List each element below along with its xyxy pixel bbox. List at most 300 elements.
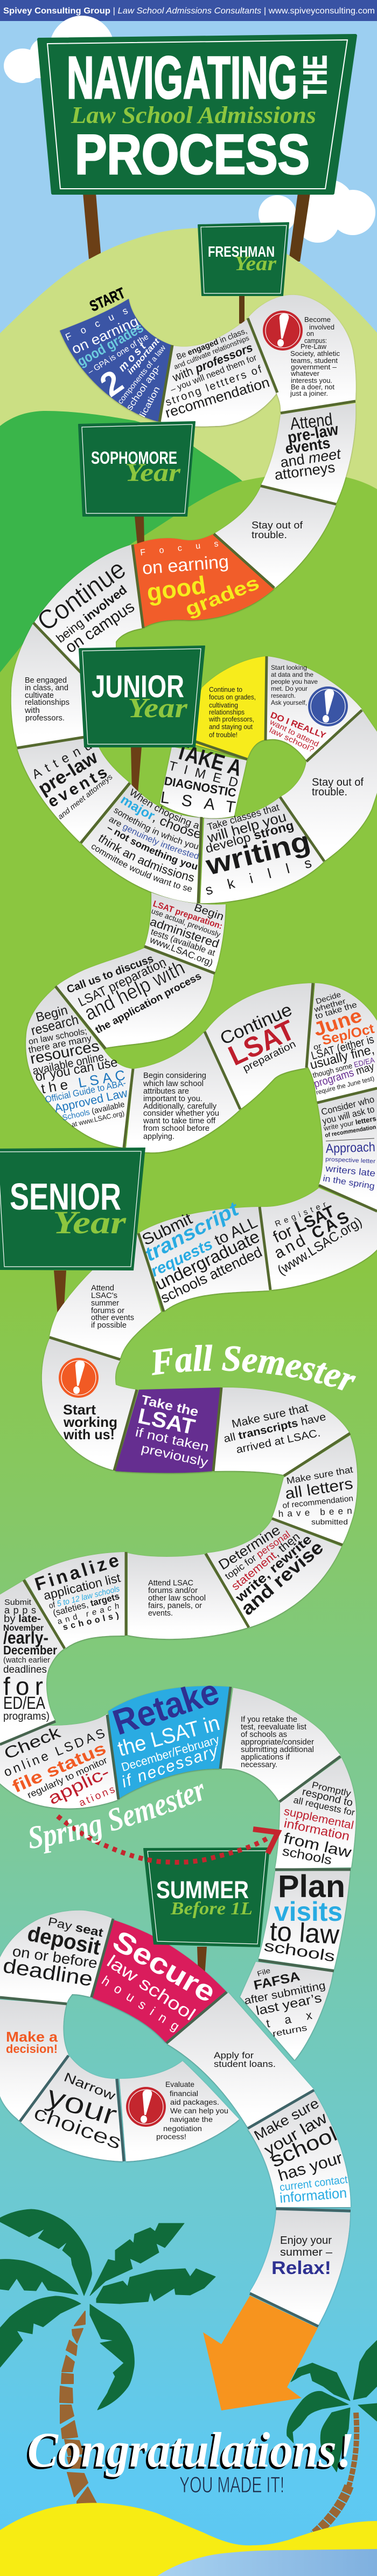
tile text: of 5 to 12 law schools [48, 1584, 121, 1611]
icon: orange exclamation [59, 1358, 99, 1398]
tile text: consider whether you [143, 1109, 219, 1118]
tile text: When choosing a [130, 788, 199, 829]
tile text: Attend [30, 738, 94, 782]
tile text [134, 1393, 210, 1470]
tile text: after submitting [243, 1980, 326, 2007]
road tile: become involved on campus [248, 295, 356, 413]
tile text: appropriate/consider [241, 1738, 314, 1747]
tile text: events [45, 763, 110, 811]
tile text [251, 2095, 348, 2206]
tile text: programs) [3, 1711, 50, 1722]
tile text: Begin [192, 902, 225, 923]
header bar: Spivey Consulting Group | Law School Admissions Consultants | www.spiveyconsulting.com [3, 6, 375, 16]
tile text: Finalize [32, 1550, 121, 1595]
tile text: Focus [139, 539, 219, 558]
tile text: deposit [25, 1922, 102, 1960]
tile text [139, 539, 262, 620]
tile text: for [3, 1672, 43, 1700]
tile text: relationships [209, 708, 245, 716]
tile text: submitting additional [241, 1746, 314, 1754]
sign: junior year [79, 646, 205, 747]
tile text: housing [99, 1973, 182, 2034]
tile text: skills [204, 854, 313, 898]
sign: summer before 1l: SUMMER [156, 1876, 249, 1904]
tile text: applying. [143, 1132, 174, 1141]
tile text: major, choose [121, 796, 199, 838]
tile text: at data and the [271, 671, 313, 678]
tile text: applications if [241, 1753, 290, 1762]
tile text: school [267, 2123, 340, 2172]
tile text: available online, [31, 1050, 108, 1077]
tile text: Attend LSAC [148, 1578, 193, 1588]
tile text: whether [312, 997, 347, 1014]
tile text: schools) [62, 1611, 120, 1632]
tile text: from law [282, 1830, 353, 1861]
tile text: lication [138, 385, 162, 419]
tile text [241, 1715, 314, 1769]
tile text: Narrow [62, 2070, 117, 2104]
tile text [309, 990, 376, 1096]
sign: summer before 1l [144, 1848, 269, 1947]
tile text: December/February [120, 1733, 221, 1774]
tile text: on campus [62, 597, 138, 657]
road tile: check online lsdas file status [0, 1714, 118, 1809]
tile text: government – [291, 363, 337, 371]
tile text: other events [91, 1313, 134, 1322]
tile text: process! [156, 2132, 186, 2141]
tile text: schools attended [158, 1244, 264, 1306]
road tile: begin lsat preparation [144, 892, 226, 972]
tile text: Pay seat [47, 1914, 105, 1940]
tile text: school app- [124, 362, 163, 412]
road tile: stay out of trouble (sophomore) [214, 487, 336, 588]
title: script subtitle: Law School Admissions [71, 102, 316, 128]
tile text: working [63, 1414, 117, 1430]
road tile: make a decision [0, 2000, 68, 2121]
road tile: register for lsat and cas [261, 1188, 377, 1290]
tile text: in the spring [322, 1174, 375, 1191]
callout: do i really want to attend law school: DO I REALLY [269, 711, 327, 741]
tile text: – you will need them for [169, 353, 259, 395]
tile text [148, 899, 225, 968]
road tile: when choosing a major [82, 784, 200, 904]
tile text: writers late [324, 1163, 376, 1179]
tile text: ED/EA [3, 1693, 46, 1713]
road tile: attend pre-law events (junior) [17, 737, 130, 843]
tile text: of schools as [241, 1730, 287, 1739]
tile text: Schools (available [61, 1100, 125, 1123]
tile text [163, 326, 271, 421]
hill: light green [0, 228, 377, 539]
tile text: file status [9, 1738, 109, 1796]
road tile: retake the lsat [108, 1671, 229, 1798]
tile text: Stay out of [252, 520, 303, 531]
tile text: research [30, 1012, 80, 1039]
tile text: all letters [284, 1475, 354, 1503]
road tile: begin considering law school attributes [126, 1032, 240, 1152]
tile text: write your letters [323, 1114, 377, 1132]
icon: blue exclamation [308, 686, 348, 726]
tile text: – GPA is one of the [86, 332, 150, 376]
tile text: supplemental [283, 1805, 355, 1832]
tile text: Take classes that [206, 802, 281, 833]
tile text: though some ED/EA [312, 1055, 376, 1080]
road tile: continue to focus on grades (yellow) [183, 656, 266, 759]
sign: freshman year [198, 223, 289, 296]
road tile: be engaged in class (junior) [11, 623, 86, 747]
tile text: for LSAT [270, 1203, 338, 1246]
tile text: Relax! [271, 2258, 331, 2278]
tile text: the [40, 1076, 69, 1097]
tile text: information [279, 2185, 347, 2206]
tile text: will help you [205, 808, 288, 846]
callout: do i really want to attend law school: want to attend [268, 717, 320, 748]
tile text: financial [170, 2089, 198, 2098]
tile text: Attend [289, 409, 333, 434]
tile text: met. Do your [271, 685, 308, 692]
tile text: strong lettters of [164, 363, 263, 409]
road tile: focus on earning good grades (blue start) [60, 285, 172, 422]
tile text: or [312, 1041, 323, 1052]
tile text [32, 1550, 122, 1632]
tile text [320, 1094, 377, 1191]
tile text: campus: [304, 337, 327, 345]
road tile: begin research on law schools [26, 988, 132, 1148]
title: process: PROCESS [75, 123, 310, 186]
title sign [39, 36, 355, 193]
tile text: navigate the [170, 2115, 213, 2124]
tile text: – not something you [108, 827, 198, 870]
tile text: prospective letter [325, 1156, 376, 1165]
tile text: pre-law [34, 747, 101, 799]
tile text [159, 738, 245, 816]
tile text [214, 2050, 276, 2069]
tile text: ations [78, 1784, 116, 1809]
tile text: www.LSAC.org) [148, 935, 214, 968]
road tile: make sure all letters submitted [272, 1435, 357, 1544]
tile text: deadlines [3, 1664, 47, 1675]
road tile: take classes that develop strong writing skills [200, 797, 324, 903]
tile text: whatever [290, 370, 319, 377]
tile text: respond to [301, 1786, 354, 1809]
tile text [2, 1914, 105, 1991]
road tile: decide whether to take june or sep/oct lsat [308, 983, 377, 1103]
tile text: grades [182, 571, 262, 620]
tile text: committee would want to see [92, 844, 192, 892]
tile text [263, 1869, 345, 1965]
arrow: orange final arrow [203, 2296, 318, 2410]
sign: summer before 1l: Before 1L [170, 1899, 253, 1919]
tile text: are genuinely interested [109, 818, 199, 860]
tile text [281, 1780, 356, 1868]
tile text: DIAGNOSTIC [163, 774, 238, 800]
road tile: start looking at data [266, 656, 362, 760]
palm trunk [314, 2413, 357, 2534]
tile text: if necessary [120, 1742, 221, 1791]
tile text: being involved [53, 582, 129, 645]
tile text: on earning [69, 313, 141, 357]
tile text: November [3, 1624, 44, 1633]
road tile: continue being involved on campus [32, 545, 142, 674]
tile text: pre-law [286, 421, 340, 447]
tile text: and staying out [209, 723, 253, 731]
closing: you made it: YOU MADE IT! [179, 2472, 284, 2497]
tile text: think an admissions [99, 834, 194, 881]
tile text [27, 1003, 129, 1129]
tile text: Register [274, 1200, 327, 1229]
tile text: and cultivate relationships [173, 334, 250, 371]
road tile: be engaged with professors [161, 319, 276, 427]
tile text: Continue to [209, 685, 242, 693]
sign: senior year [0, 1148, 145, 1270]
tile text: Pre-Law [301, 343, 327, 351]
tile text: of recommendation [282, 1494, 354, 1510]
tile text: Take the [140, 1393, 200, 1420]
tile text: previously [140, 1441, 210, 1470]
tile text: requests to ALL [148, 1214, 260, 1280]
tile text: Submit [4, 1598, 32, 1607]
tile text: schools [281, 1844, 333, 1868]
tile text: want to take time off [143, 1116, 216, 1125]
tile text: Be engaged in class, [175, 326, 248, 362]
tile text [217, 999, 299, 1074]
tile text: Official Guide to ABA- [44, 1078, 127, 1105]
tile text: and meet attorneys [56, 772, 114, 821]
tile text: there are many [27, 1033, 93, 1055]
tile text: aid packages. [170, 2098, 219, 2106]
road tile: finalize application list [25, 1550, 125, 1648]
tile text: forums or [91, 1306, 124, 1315]
tile text [3, 1598, 57, 1722]
tile text: June [311, 1004, 365, 1041]
tile text [64, 305, 167, 419]
tile text: with [24, 706, 40, 715]
tile text: on [306, 330, 314, 338]
right cloud [259, 180, 375, 243]
road tile: start working with us [42, 1338, 137, 1470]
tile text: Enjoy your [280, 2235, 332, 2247]
sign: senior year: SENIOR [10, 1176, 121, 1218]
tile text: Make sure [251, 2095, 322, 2144]
tile text: negotiation [163, 2124, 202, 2133]
road tile: make sure transcripts arrived [214, 1387, 349, 1475]
tile text: by late- [4, 1613, 41, 1625]
road tile: secure law school housing [93, 1920, 226, 2043]
tile text [31, 2070, 124, 2154]
tile text: trouble. [252, 530, 287, 540]
tile text: We can help you [170, 2106, 228, 2115]
tile text: with us! [63, 1426, 115, 1442]
road tile: enjoy your summer [250, 2210, 350, 2325]
tile text: have been [278, 1506, 352, 1519]
tile text: Focus [64, 305, 129, 343]
tile text: your [43, 2079, 121, 2132]
tile text: on law schools; [28, 1027, 88, 1047]
heading: fall semester [152, 1345, 357, 1390]
tile text: LSAT preparation [76, 955, 169, 1009]
road tile: promptly respond to requests [275, 1758, 356, 1869]
tile text: Begin [34, 1003, 69, 1025]
tile text: Determine [215, 1522, 283, 1573]
tile text: preparation [241, 1039, 298, 1074]
tile text [91, 1283, 134, 1330]
road tile: narrow your choices [20, 2056, 124, 2161]
tile text: FAFSA [253, 1969, 301, 1993]
tile text: /early- [3, 1628, 48, 1647]
tile text: require the June test) [315, 1074, 375, 1096]
tile text: Consider who [320, 1094, 375, 1117]
tile text: usually fine, [309, 1042, 376, 1073]
tile text: important [125, 336, 162, 376]
tile text: application list [42, 1570, 122, 1603]
tile text: online LSDAS [2, 1726, 107, 1780]
tile text: Make a [6, 2029, 58, 2045]
tile text [24, 676, 69, 723]
tile text: information [283, 1816, 351, 1843]
road tile: submit transcript requests [138, 1197, 269, 1311]
water [157, 2549, 377, 2576]
road tile: apply for student loans [167, 1993, 314, 2127]
callout: do i really want to attend law school: law school? [268, 725, 316, 754]
tile text: apps [4, 1605, 36, 1616]
tile text: focus on grades, [209, 693, 256, 701]
tile text [30, 738, 114, 821]
title: the (vertical): THE [297, 55, 333, 99]
tile text: and meet [279, 445, 343, 471]
tile text: and reach [57, 1601, 120, 1626]
tile text: other law school [148, 1593, 206, 1603]
tile text [92, 788, 199, 892]
tile text: choices [31, 2101, 124, 2154]
tile text: recommendation [163, 374, 271, 421]
tile text: Decide [315, 990, 342, 1006]
tile text: LSAC's [91, 1291, 117, 1300]
tile text: (www.LSAC.org) [275, 1214, 365, 1278]
tile text: develop strong [204, 818, 295, 856]
sign: freshman year: Year [234, 252, 277, 275]
road tile: continue lsat preparation [206, 983, 313, 1109]
tile text: law school [103, 1951, 199, 2024]
tile text: Stay out of [312, 777, 364, 788]
tile text: and CAS [271, 1208, 352, 1262]
road tile: focus on earning good grades (orange) [132, 534, 274, 628]
heading: fall semester: Fall Semester [152, 1345, 357, 1390]
tile text: with professors, [208, 715, 254, 723]
tile text: attorneys [274, 459, 336, 483]
title sign posts [83, 193, 310, 262]
tile text: Approved Law [53, 1086, 129, 1115]
road tile: stay out of trouble (junior) [280, 710, 377, 861]
tile text: summer [91, 1299, 119, 1308]
tile text: trouble. [312, 786, 347, 798]
tile text: on earning [142, 551, 229, 578]
tile text: professors. [25, 713, 65, 723]
tile text: which law school [143, 1079, 204, 1088]
tile text: Be engaged [25, 676, 67, 685]
palm leaves [287, 2340, 377, 2472]
tile text [208, 685, 256, 739]
tile text [274, 409, 343, 483]
tile text: tests (available at [150, 928, 217, 958]
sign: junior year: JUNIOR [92, 669, 184, 704]
tile text: current contact [279, 2174, 348, 2194]
tile text: forums and/or [148, 1586, 198, 1595]
road tile: attend lsac forums [128, 1553, 248, 1639]
tile text [312, 777, 364, 798]
tile text: to law [269, 1916, 340, 1950]
road tile: call us to discuss [55, 948, 214, 1048]
tile text: topic for personal [223, 1529, 292, 1582]
tile text: research. [271, 692, 296, 699]
tile text: in class, and [25, 683, 68, 692]
tile text: Make sure that [231, 1402, 310, 1431]
tile text: just a joiner. [290, 390, 328, 397]
background: sky [0, 0, 377, 701]
header bar [0, 0, 377, 21]
tile text [271, 664, 318, 706]
road tile: attend pre-law events [261, 403, 355, 504]
tile text: cultivate [25, 691, 54, 700]
tile text: people you have [271, 678, 318, 685]
callout: do i really want to attend law school [268, 711, 327, 754]
tile text: events. [148, 1609, 173, 1618]
tile text: 2 [93, 363, 130, 404]
tile text: last year’s [255, 1990, 323, 2018]
tile text: summer – [280, 2247, 333, 2258]
tile text: TAKE A [173, 738, 245, 781]
tile text: and help with [81, 957, 188, 1025]
tile text: regularly to monitor [26, 1755, 109, 1801]
tile text: write, rewrite [232, 1532, 315, 1605]
tile text: returns [272, 2023, 308, 2039]
tile text [6, 2029, 58, 2056]
tile text: programs may [312, 1061, 375, 1090]
palm leaves [0, 2209, 215, 2410]
icon: red exclamation [263, 311, 303, 351]
tile text: and revise [237, 1537, 327, 1619]
tile text: cultivating [209, 701, 238, 709]
tile text: if possible [91, 1321, 127, 1330]
road tile: evaluate financial aid packages [120, 2061, 239, 2161]
tile text [222, 1402, 327, 1456]
tile text [203, 802, 313, 898]
tile text: arrived at LSAC. [235, 1427, 322, 1456]
tile text [99, 1924, 221, 2034]
palm tree: right [287, 2340, 377, 2534]
tile text: Begin considering [143, 1071, 206, 1080]
tile text [2, 1723, 116, 1809]
palm tree: left [0, 2209, 215, 2505]
tile text: LSAT [159, 788, 236, 816]
tile text: Sep/Oct [320, 1021, 376, 1048]
tile text [290, 316, 340, 397]
road tile: determine personal statement topic [207, 1520, 341, 1627]
tile text: Evaluate [165, 2080, 194, 2089]
hill: mid green [0, 411, 269, 701]
tile text: deadline [2, 1954, 94, 1991]
tile text: statement, then [229, 1530, 302, 1593]
tile text: from school before [143, 1124, 210, 1133]
tile text: the LSAT in [115, 1711, 222, 1761]
tile text: Submit [139, 1210, 196, 1249]
sign: sophomore year: Year [125, 458, 181, 487]
tile text: if not taken [134, 1425, 210, 1455]
road tile: consider letter writers [318, 1089, 377, 1211]
tile text: your law [261, 2109, 331, 2159]
sign: senior year: Year [53, 1205, 127, 1240]
tile text: Make sure that [285, 1464, 354, 1486]
tile text: Apply for [214, 2050, 254, 2060]
